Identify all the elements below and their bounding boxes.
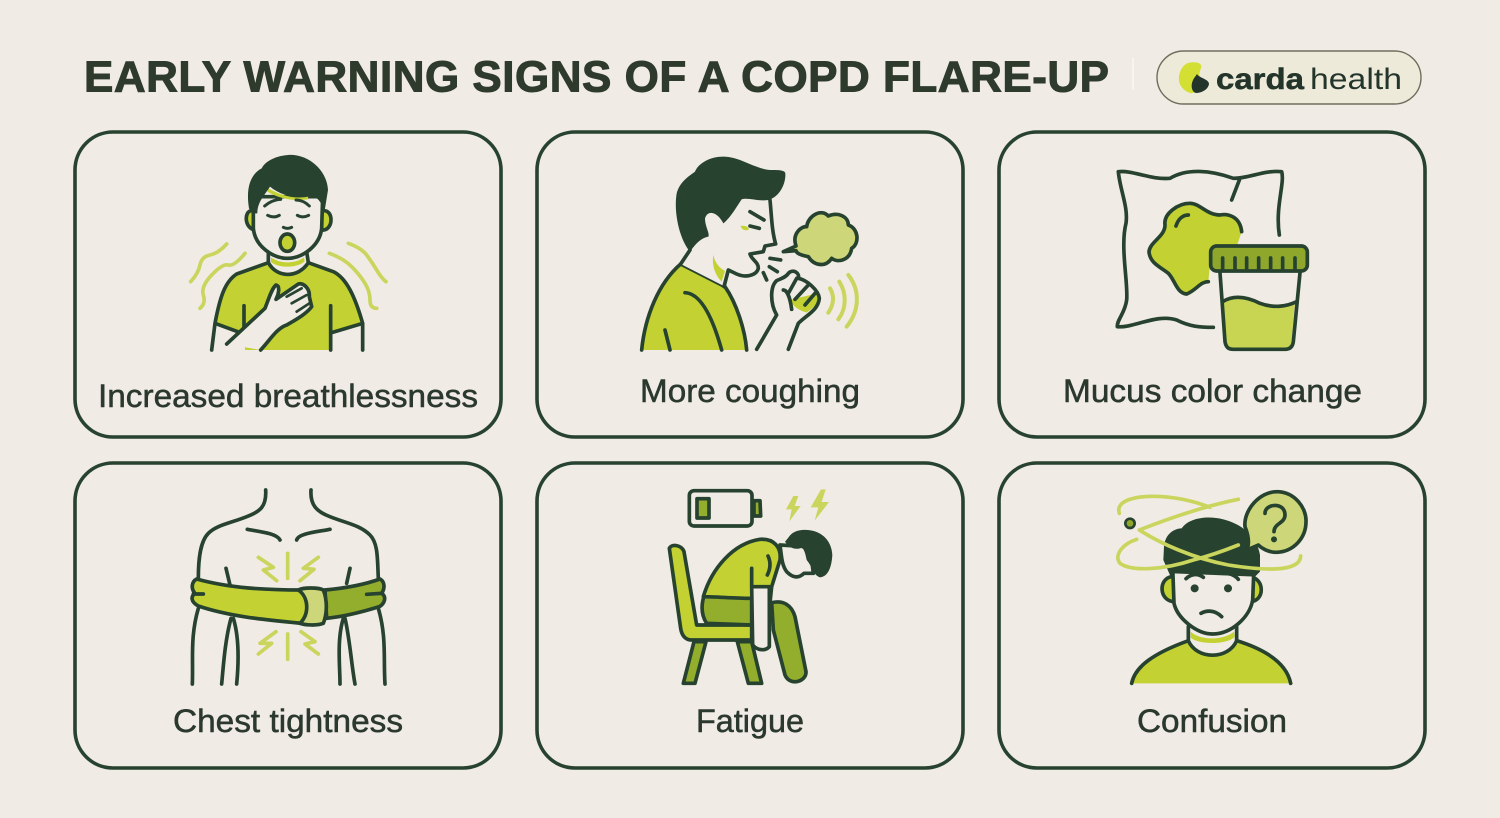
panel: confusion: [999, 463, 1425, 768]
logo: carda health: [1157, 51, 1421, 104]
icon: chest with belt: [192, 490, 385, 684]
icon: breathless man: [191, 155, 386, 350]
logo: carda health: health: [1310, 63, 1402, 96]
label: More coughing: [640, 373, 860, 409]
title: EARLY WARNING SIGNS OF A COPD FLARE-UP: [84, 52, 1109, 102]
icon: pillow and mucus cup: [1117, 171, 1307, 349]
logo: carda health: carda: [1216, 63, 1304, 96]
icon: coughing man: [642, 157, 857, 350]
label: Increased breathlessness: [98, 378, 478, 414]
label: Fatigue: [696, 703, 804, 739]
panel: fatigue: [537, 463, 963, 768]
panel: more coughing: [537, 132, 963, 437]
panel: chest tightness: [75, 463, 501, 768]
icon: tired person on chair with low battery: [669, 489, 832, 683]
label: Confusion: [1137, 703, 1287, 739]
panel: increased breathlessness: [75, 132, 501, 437]
label: Mucus color change: [1063, 373, 1362, 409]
label: Chest tightness: [173, 703, 403, 739]
icon: confused head with question bubble: [1118, 492, 1306, 683]
panel: mucus color change: [999, 132, 1425, 437]
